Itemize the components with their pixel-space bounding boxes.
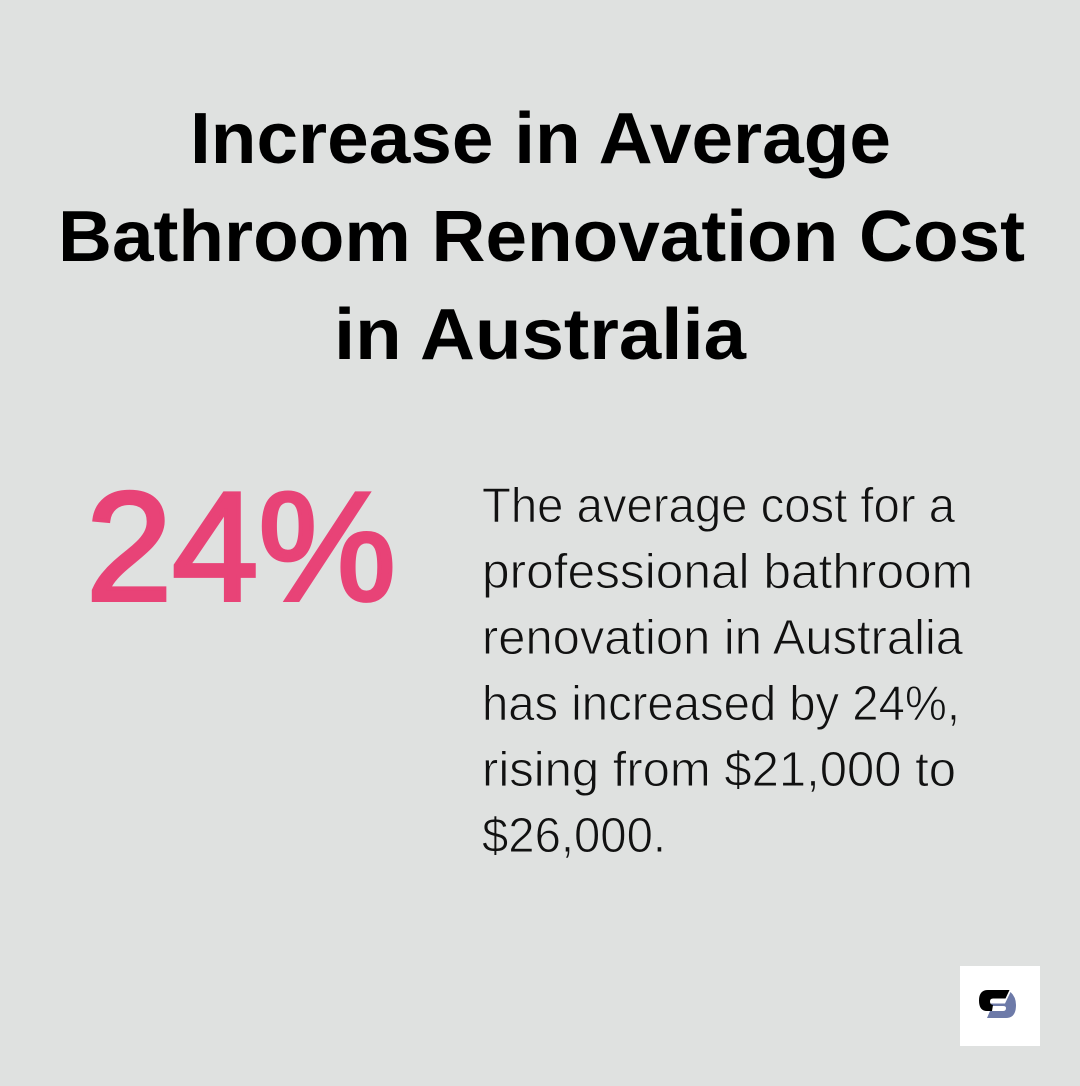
title: Increase in Average [190,99,891,179]
big stat: 24%: 24% [86,460,396,633]
title: Bathroom Renovation Cost [58,197,1025,277]
description text: $26,000. [482,809,666,863]
description text: has increased by 24%, [482,677,960,731]
description text: The average cost for a [482,479,956,533]
icon: logo mark [979,990,1016,1018]
title: in Australia [334,295,747,375]
logo badge [960,966,1040,1046]
title [58,99,1025,375]
description text: renovation in Australia [482,611,964,665]
description text: professional bathroom [482,545,973,599]
description text [482,479,973,863]
description text: rising from $21,000 to [482,743,956,797]
